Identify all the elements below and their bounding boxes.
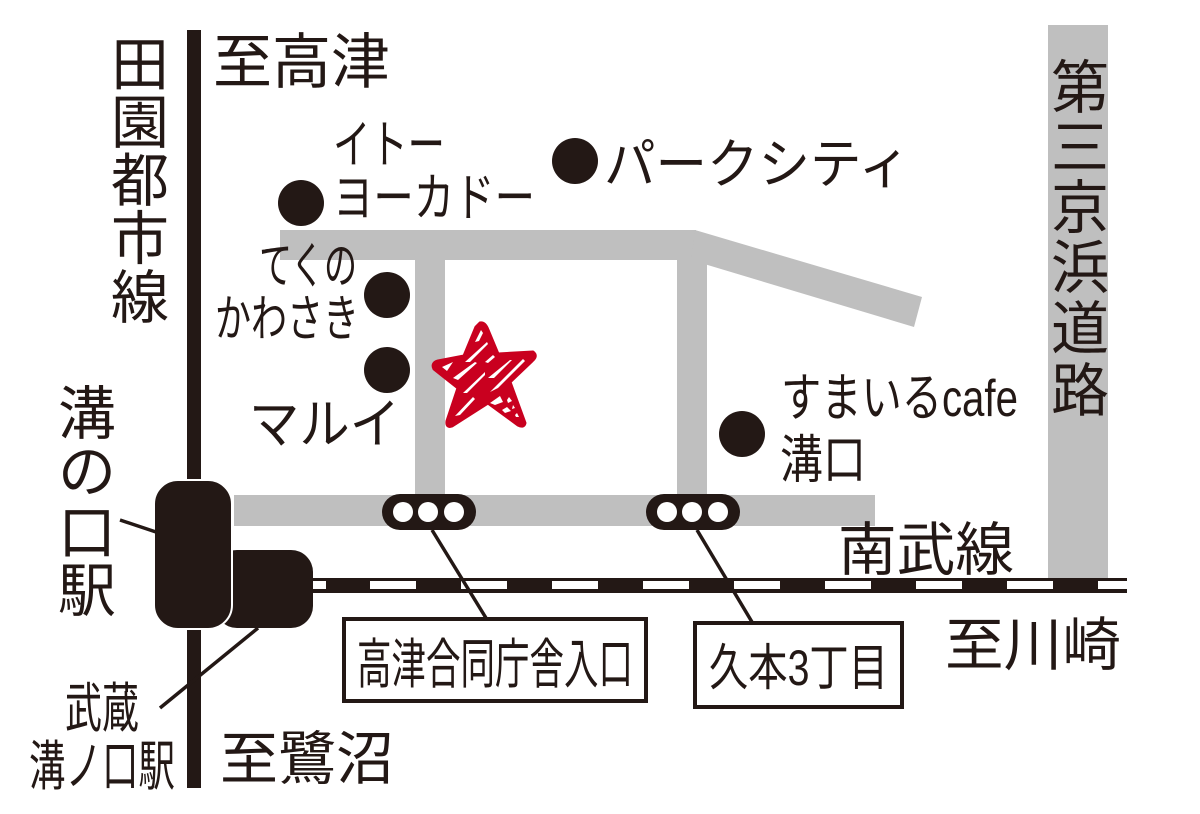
label: to Kugenuma: 至鷺沼 (220, 727, 394, 792)
expressway (1048, 25, 1108, 578)
label: Musashi-Mizonokuchi station: 武蔵 (65, 679, 139, 739)
station: Mizonokuchi (154, 480, 232, 629)
icon: Marui marker (364, 347, 410, 393)
label: Teku no Kawasaki (215, 238, 359, 347)
label: Musashi-Mizonokuchi station: 溝ノ口駅 (29, 737, 175, 797)
railway: Den-en-toshi line (187, 30, 201, 788)
railway: Nanbu line (300, 578, 1127, 593)
traffic signal: Takatsu Godo Chosha Iriguchi (382, 494, 476, 530)
icon: destination star (433, 323, 535, 426)
label: Den-en-toshi line: 田園都市線 (111, 33, 169, 331)
leader line: Musashi-Mizonokuchi (160, 628, 258, 708)
traffic signal: Kumoto 3-chome (646, 494, 740, 530)
label: Nanbu line: 南武線 (838, 518, 1014, 583)
label: Sumairu cafe Mizonokuchi: すまいるcafe (781, 370, 1018, 428)
leader line: signal 1 (432, 530, 486, 618)
label: Sumairu cafe Mizonokuchi (780, 370, 1018, 490)
label: Ito-Yokado (333, 117, 535, 228)
label: to Takatsu: 至高津 (213, 29, 390, 96)
callout: Kumoto 3-chome (695, 623, 902, 707)
icon: Sumairu cafe marker (719, 411, 765, 457)
label: Daisan Keihin road: 第三京浜道路 (1051, 56, 1109, 424)
road network (234, 230, 922, 526)
icon: Ito-Yokado marker (278, 180, 324, 226)
label: Marui: マルイ (249, 395, 400, 455)
icon: Teku no Kawasaki marker (364, 272, 410, 318)
label: to Kawasaki: 至川崎 (945, 613, 1121, 678)
label: Park City: パークシティ (604, 135, 910, 195)
callout: Takatsu Godo Chosha Iriguchi (344, 619, 646, 701)
callout: Takatsu Godo Chosha Iriguchi: 高津合同庁舎入口 (357, 635, 633, 695)
callout: Kumoto 3-chome: 久本3丁目 (709, 640, 888, 696)
label: Teku no Kawasaki: かわさき (215, 291, 359, 347)
label: Teku no Kawasaki: てくの (259, 238, 357, 294)
label: Ito-Yokado: イトー (333, 117, 445, 175)
leader line: signal 2 (697, 530, 752, 622)
icon: Park City marker (552, 138, 598, 184)
label: Ito-Yokado: ヨーカドー (333, 170, 535, 228)
label: Musashi-Mizonokuchi station (29, 679, 175, 797)
leader line: Mizonokuchi (120, 520, 156, 532)
label: Sumairu cafe Mizonokuchi: 溝口 (780, 432, 866, 490)
label: Mizonokuchi station: 溝の口駅 (58, 382, 116, 624)
station: Musashi-Mizonokuchi (215, 550, 313, 628)
